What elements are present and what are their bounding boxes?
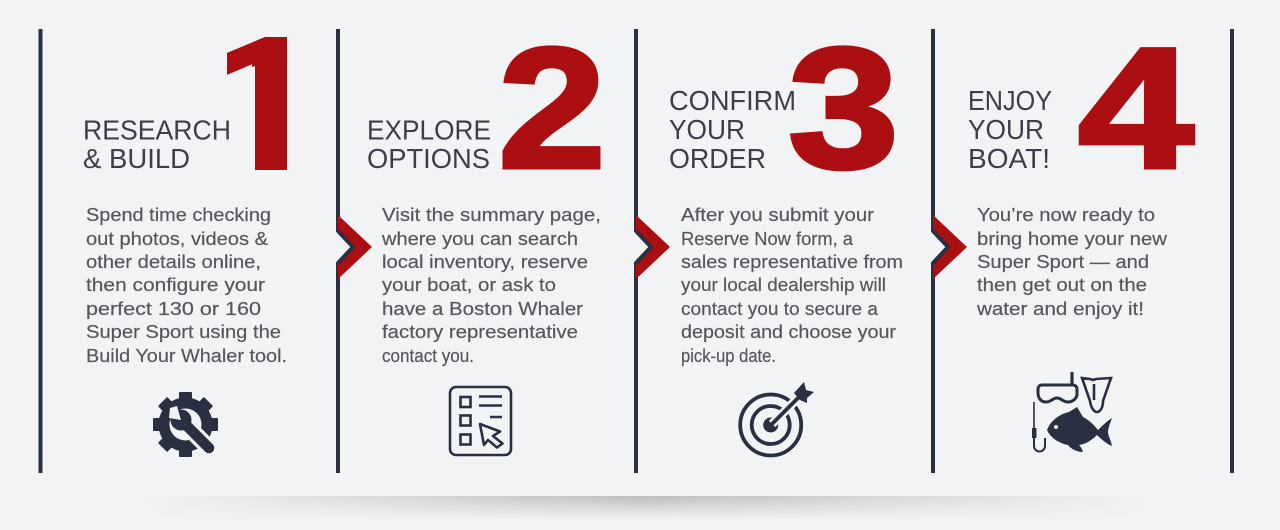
panel: step 4 enjoy your boat xyxy=(968,12,1194,452)
body text: step 1: Spend time checking xyxy=(86,205,271,225)
divider bars xyxy=(38,29,1234,473)
body text: step 2: local inventory, reserve xyxy=(382,252,588,272)
icon: checklist with cursor xyxy=(450,387,511,455)
body text: step 3: pick-up date. xyxy=(681,346,776,366)
heading: research and build: RESEARCH xyxy=(83,114,231,146)
panel: step 1 research and build xyxy=(84,37,287,457)
numeral 1: 1 xyxy=(188,0,348,214)
heading: enjoy your boat: ENJOY xyxy=(968,85,1052,116)
body text: step 3: After you submit your xyxy=(681,205,874,225)
heading: enjoy your boat: BOAT! xyxy=(968,143,1050,174)
heading: enjoy your boat: YOUR xyxy=(968,114,1044,145)
arrow: step 2 to 3 xyxy=(636,215,670,279)
body text: step 1 xyxy=(86,205,287,366)
numeral 3: 3 xyxy=(788,12,899,204)
bottom shadow xyxy=(216,496,1074,516)
body text: step 1: other details online, xyxy=(86,252,261,272)
heading: research and build: & BUILD xyxy=(83,143,190,174)
heading: confirm your order: YOUR xyxy=(669,114,745,145)
body text: step 2: contact you. xyxy=(382,346,474,366)
body text: step 2: factory representative xyxy=(382,322,578,342)
body text: step 1: out photos, videos & xyxy=(86,229,268,249)
body text: step 4: water and enjoy it! xyxy=(976,299,1144,319)
heading: research and build xyxy=(83,114,231,174)
arrow: step 3 to 4 xyxy=(933,215,967,279)
icon: target with arrow xyxy=(740,382,814,456)
body text: step 2: where you can search xyxy=(381,229,578,249)
arrow: step 1 to 2 xyxy=(338,215,372,279)
body text: step 3: Reserve Now form, a xyxy=(681,229,854,249)
heading: confirm your order: CONFIRM xyxy=(669,85,796,116)
body text: step 4: bring home your new xyxy=(977,229,1168,249)
heading: explore options: OPTIONS xyxy=(367,143,490,174)
panel: step 2 explore options xyxy=(367,12,606,455)
body text: step 2 xyxy=(381,205,601,366)
heading: confirm your order: ORDER xyxy=(669,143,766,174)
heading: enjoy your boat xyxy=(968,85,1052,174)
body text: step 4 xyxy=(976,205,1168,319)
body text: step 3: your local dealership will xyxy=(681,275,886,295)
body text: step 3 xyxy=(681,205,903,366)
heading: explore options: EXPLORE xyxy=(367,114,491,146)
body text: step 4: Super Sport — and xyxy=(977,252,1149,272)
body text: step 1: perfect 130 or 160 xyxy=(86,299,261,319)
body text: step 3: contact you to secure a xyxy=(681,299,879,319)
body text: step 1: Super Sport using the xyxy=(86,322,281,342)
body text: step 4: You’re now ready to xyxy=(977,205,1155,225)
icon: snorkel gear, hook and fish xyxy=(1032,372,1112,452)
heading: explore options xyxy=(367,114,491,174)
numeral 2: 2 xyxy=(498,12,606,204)
icon: gear and wrench xyxy=(153,392,218,457)
body text: step 4: then get out on the xyxy=(977,275,1147,295)
numeral 4: 4 xyxy=(1078,12,1194,204)
body text: step 2: have a Boston Whaler xyxy=(382,299,583,319)
body text: step 1: then configure your xyxy=(86,275,265,295)
panel: step 3 confirm your order xyxy=(669,12,903,456)
body text: step 3: sales representative from xyxy=(681,252,903,272)
body text: step 3: deposit and choose your xyxy=(681,322,896,342)
body text: step 1: Build Your Whaler tool. xyxy=(86,346,287,366)
heading: confirm your order xyxy=(669,85,796,174)
body text: step 2: Visit the summary page, xyxy=(382,205,601,225)
body text: step 2: your boat, or ask to xyxy=(382,275,556,295)
